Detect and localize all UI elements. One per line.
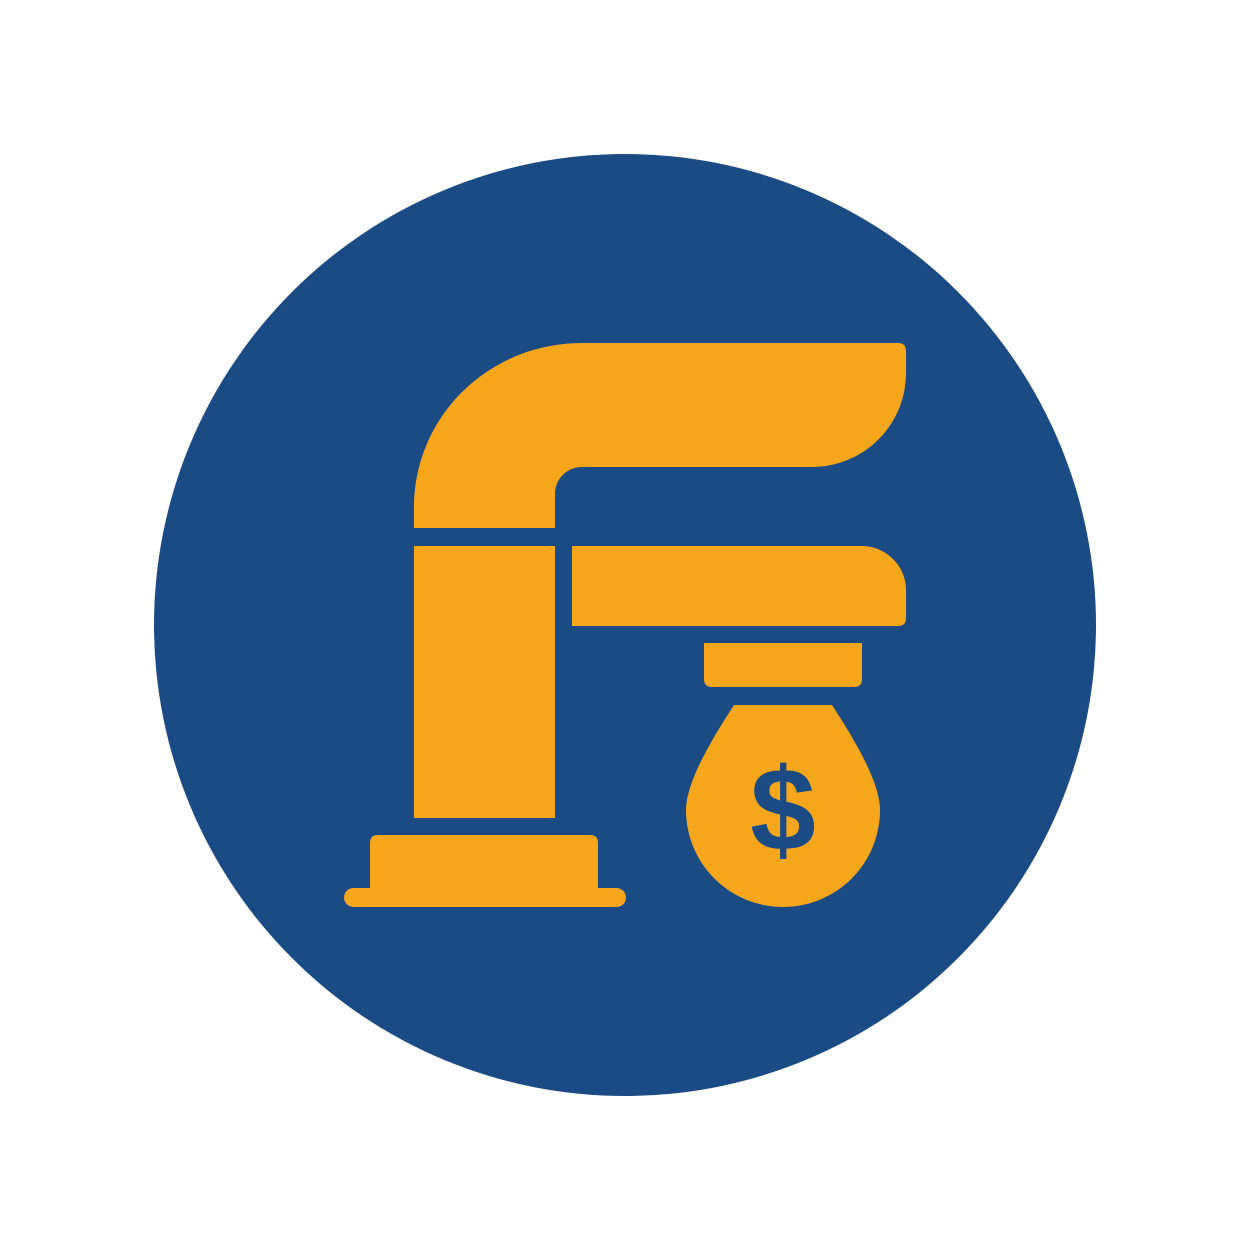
upper elbow pipe bbox=[414, 343, 906, 528]
vertical column bbox=[414, 546, 555, 818]
background circle bbox=[154, 154, 1096, 1096]
dollar sign: $ bbox=[750, 744, 816, 876]
spout bbox=[572, 546, 906, 626]
spout nozzle bbox=[704, 643, 862, 687]
icon: money bag bbox=[686, 705, 880, 907]
faucet bbox=[344, 343, 906, 907]
base bbox=[370, 835, 598, 888]
